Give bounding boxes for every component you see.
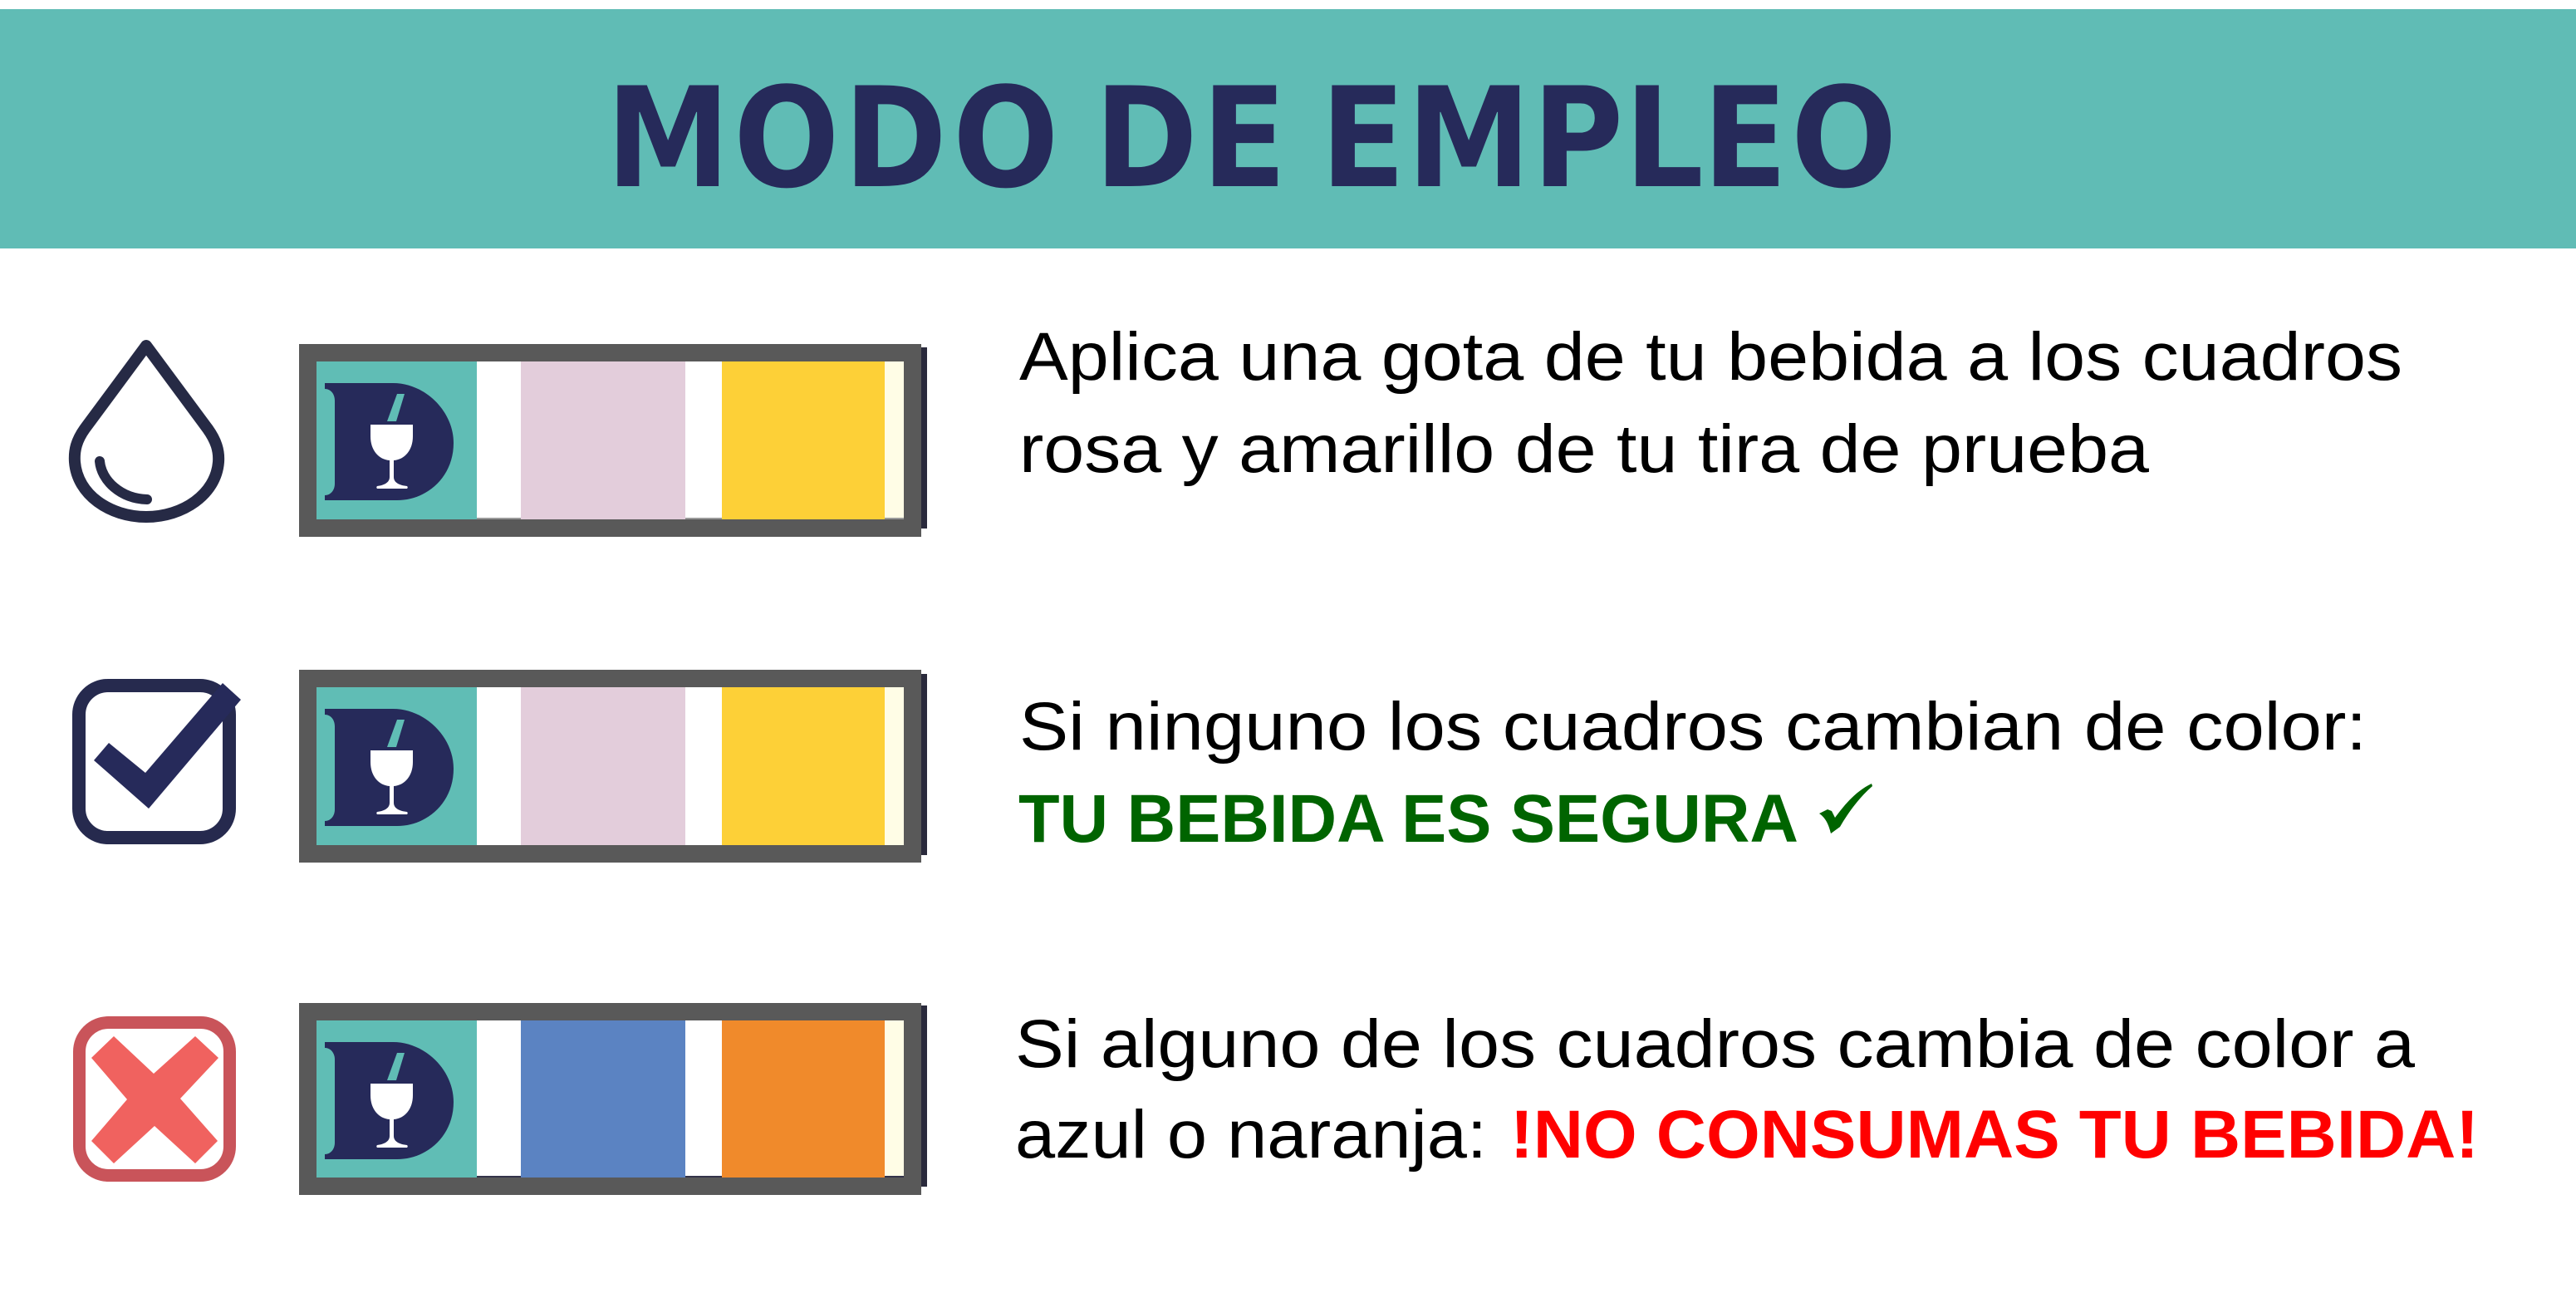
pink test square: [521, 687, 685, 845]
logo: D with glass: [325, 1042, 454, 1159]
yellow test square: [722, 361, 885, 519]
icon: water drop: [75, 346, 218, 517]
instruction text: step 3: azul o naranja:: [1015, 1097, 1487, 1173]
blue test square: [521, 1020, 685, 1178]
test strip: step 3: [299, 1003, 927, 1195]
logo: D with glass: [325, 709, 454, 826]
instruction text: step 1: [1019, 319, 2402, 487]
yellow test square: [722, 687, 885, 845]
instruction text: step 3: [1015, 1006, 2479, 1173]
instruction text: step 2: TU BEBIDA ES SEGURA: [1018, 781, 1798, 857]
instruction text: step 2: Si ninguno los cuadros cambian de color:: [1019, 689, 2367, 765]
icon: check box: [79, 683, 241, 838]
title banner: [0, 9, 2576, 248]
instruction text: step 3: Si alguno de los cuadros cambia de color a: [1015, 1006, 2415, 1082]
instruction text: step 1: rosa y amarillo de tu tira de prueba: [1019, 411, 2149, 487]
icon: green tick: [1819, 784, 1872, 833]
orange test square: [722, 1020, 885, 1178]
title: MODO DE EMPLEO: [606, 57, 1897, 219]
test strip: step 2: [299, 670, 927, 863]
icon: red cross box: [80, 1022, 229, 1175]
instruction text: step 2: [1018, 689, 2367, 857]
instruction text: step 3: !NO CONSUMAS TU BEBIDA!: [1510, 1097, 2479, 1173]
pink test square: [521, 361, 685, 519]
test strip: step 1: [299, 344, 927, 537]
instruction text: step 1: Aplica una gota de tu bebida a los cuadros: [1019, 319, 2402, 395]
logo: D with glass: [325, 383, 454, 500]
